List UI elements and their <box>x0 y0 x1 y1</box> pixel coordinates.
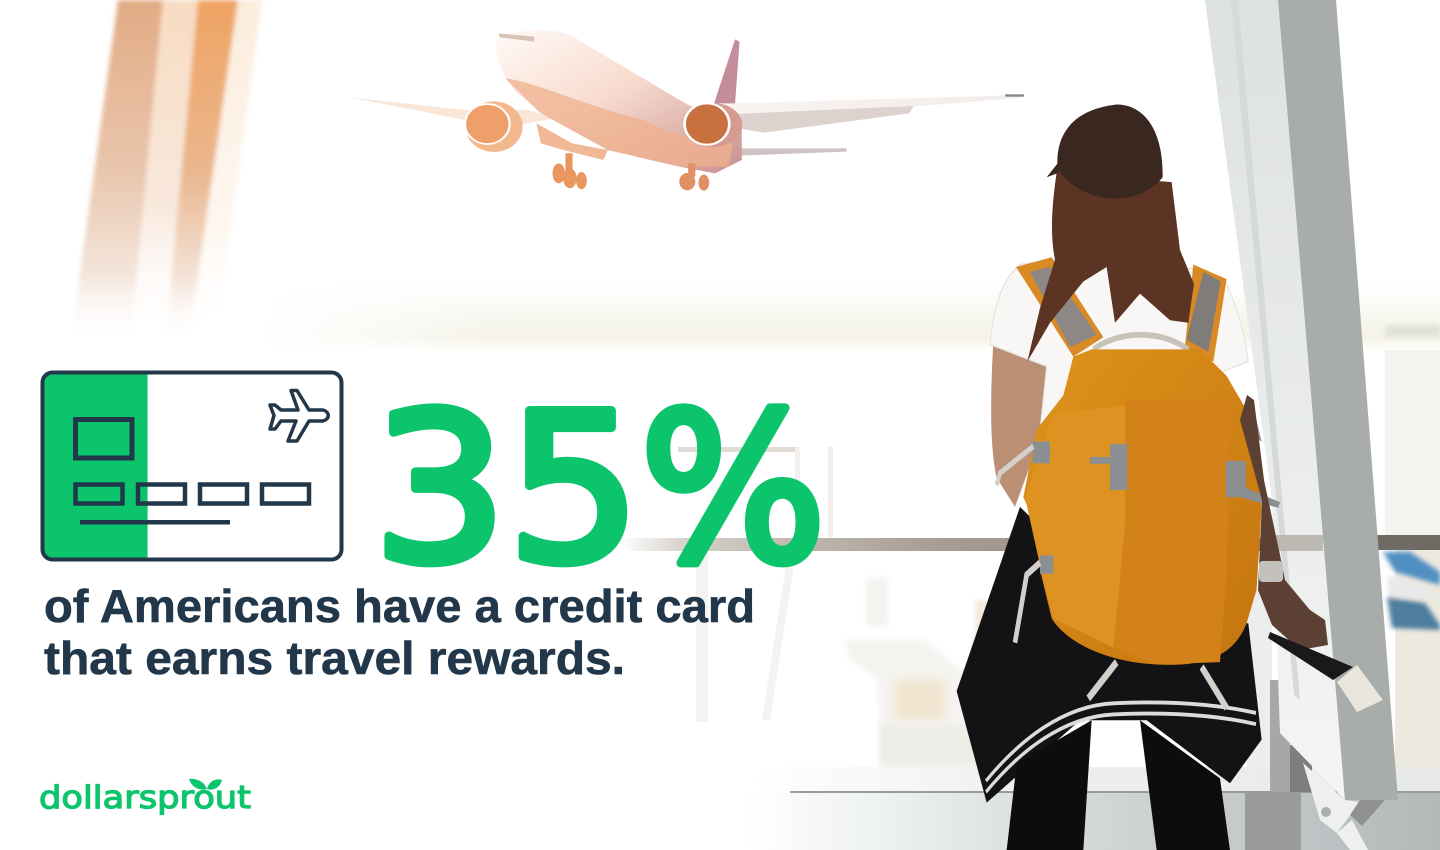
safety rail <box>620 538 1310 551</box>
arm and hand <box>1240 395 1328 650</box>
description text: that earns travel rewards. <box>44 632 625 684</box>
card number blocks <box>76 484 309 504</box>
left engine <box>465 101 523 152</box>
white fade at lower left <box>640 760 780 850</box>
front landing gear <box>552 153 587 189</box>
photo: traveller with orange backpack <box>957 105 1280 850</box>
statistic: 35% <box>373 371 826 609</box>
right engine <box>683 103 742 147</box>
hazy horizon <box>260 282 1440 535</box>
icon: travel credit card <box>42 372 342 560</box>
distant airport structures <box>678 447 1000 770</box>
lower structure behind column <box>1247 590 1272 770</box>
wing flap <box>536 123 608 160</box>
backpack straps <box>1016 257 1227 361</box>
passport <box>1268 632 1353 680</box>
far wing <box>349 97 554 125</box>
statistic: 35%: 35 <box>373 371 641 609</box>
light panel <box>1205 0 1345 800</box>
wing tip <box>1005 94 1024 97</box>
cockpit windows <box>498 33 534 42</box>
hair <box>1027 172 1194 361</box>
bag loop <box>1093 335 1188 349</box>
logo leaves <box>189 779 222 790</box>
description text: of Americans have a credit card <box>44 580 755 632</box>
description text <box>44 580 755 684</box>
loose straps <box>997 446 1227 708</box>
statistic: 35%: % <box>640 371 826 609</box>
boarding pass <box>1337 665 1383 712</box>
icon: airplane <box>270 390 328 441</box>
wristwatch <box>1259 561 1283 582</box>
jacket tied at waist <box>957 507 1262 803</box>
cap <box>1047 105 1163 199</box>
near wing <box>639 95 1023 135</box>
right forearm holding boarding pass <box>1240 395 1383 712</box>
photo: airplane in flight <box>349 30 1024 191</box>
card green strip <box>42 372 148 559</box>
card white body <box>148 372 342 559</box>
fuselage <box>496 30 742 173</box>
window frame column <box>1205 0 1398 850</box>
white t-shirt <box>990 255 1248 429</box>
tail fin <box>714 39 740 103</box>
jacket stripes <box>986 702 1256 792</box>
chip <box>76 420 132 458</box>
card outline <box>42 372 342 560</box>
backpack buckles <box>1033 414 1280 574</box>
rail seen through panel <box>1276 535 1323 551</box>
blue ground equipment <box>1383 552 1440 630</box>
foot of the column <box>1303 763 1360 833</box>
left arm <box>991 342 1048 507</box>
name line <box>80 520 230 524</box>
rail on the right <box>1370 535 1440 550</box>
window sill and floor <box>740 767 1440 850</box>
grey beam <box>1278 0 1398 800</box>
lower right view <box>1395 550 1440 768</box>
legs <box>1007 720 1230 850</box>
tailplane <box>737 148 847 156</box>
left window frame streak <box>70 0 262 345</box>
logo: dollarsprout: dollarsprout <box>39 780 251 816</box>
backpack body <box>1023 349 1262 665</box>
rear landing gear <box>679 163 709 191</box>
